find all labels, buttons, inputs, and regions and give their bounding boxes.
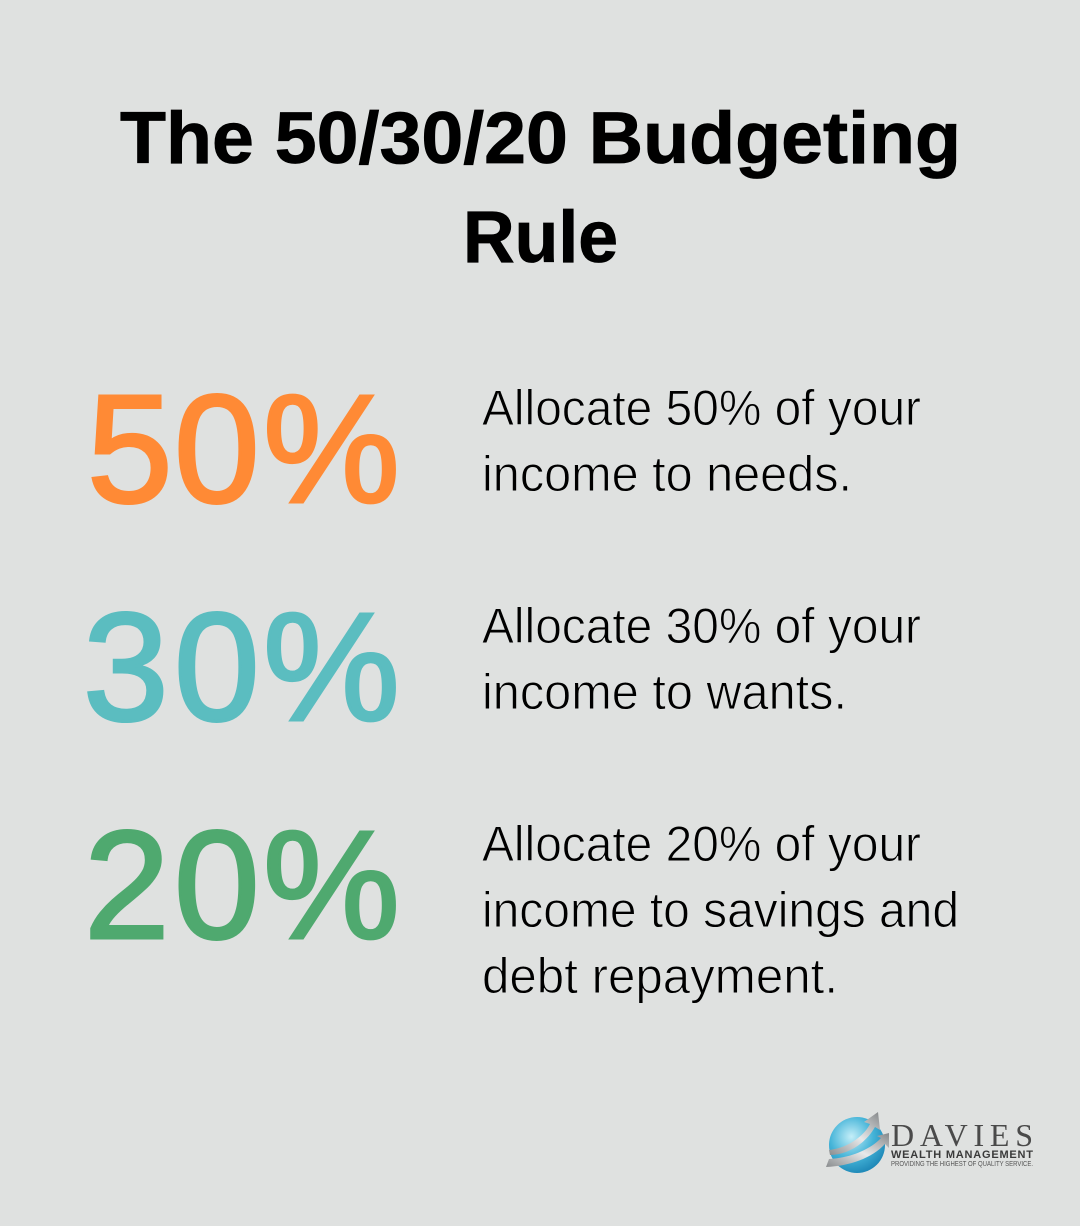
wordmark: WEALTH MANAGEMENT [891, 1149, 1033, 1161]
title: Rule [463, 197, 618, 278]
stat: 30%: 30% [83, 581, 400, 753]
stat row: 20% savings [84, 799, 959, 1004]
description: savings and debt [482, 816, 959, 1004]
wordmark: PROVIDING THE HIGHEST OF QUALITY SERVICE. [891, 1161, 1033, 1168]
stat: 50%: 50% [87, 363, 400, 535]
icon: globe with arrows [826, 1112, 889, 1173]
description: needs [482, 380, 921, 502]
stat row: 30% wants [83, 581, 921, 753]
description: savings and debt: Allocate 20% of your [482, 816, 921, 872]
description: wants [482, 598, 921, 720]
logo: Davies Wealth Management [826, 1112, 1033, 1173]
description: savings and debt: debt repayment. [482, 948, 838, 1004]
wordmark: DAVIES [891, 1117, 1033, 1153]
title: The 50/30/20 Budgeting [120, 98, 961, 179]
stat: 20%: 20% [84, 799, 400, 971]
description: needs: Allocate 50% of your [482, 380, 921, 436]
description: wants: Allocate 30% of your [482, 598, 921, 654]
stat row: 50% needs [87, 363, 921, 535]
description: wants: income to wants. [482, 664, 847, 720]
description: needs: income to needs. [482, 446, 852, 502]
description: savings and debt: income to savings and [482, 882, 959, 938]
title [120, 98, 961, 278]
